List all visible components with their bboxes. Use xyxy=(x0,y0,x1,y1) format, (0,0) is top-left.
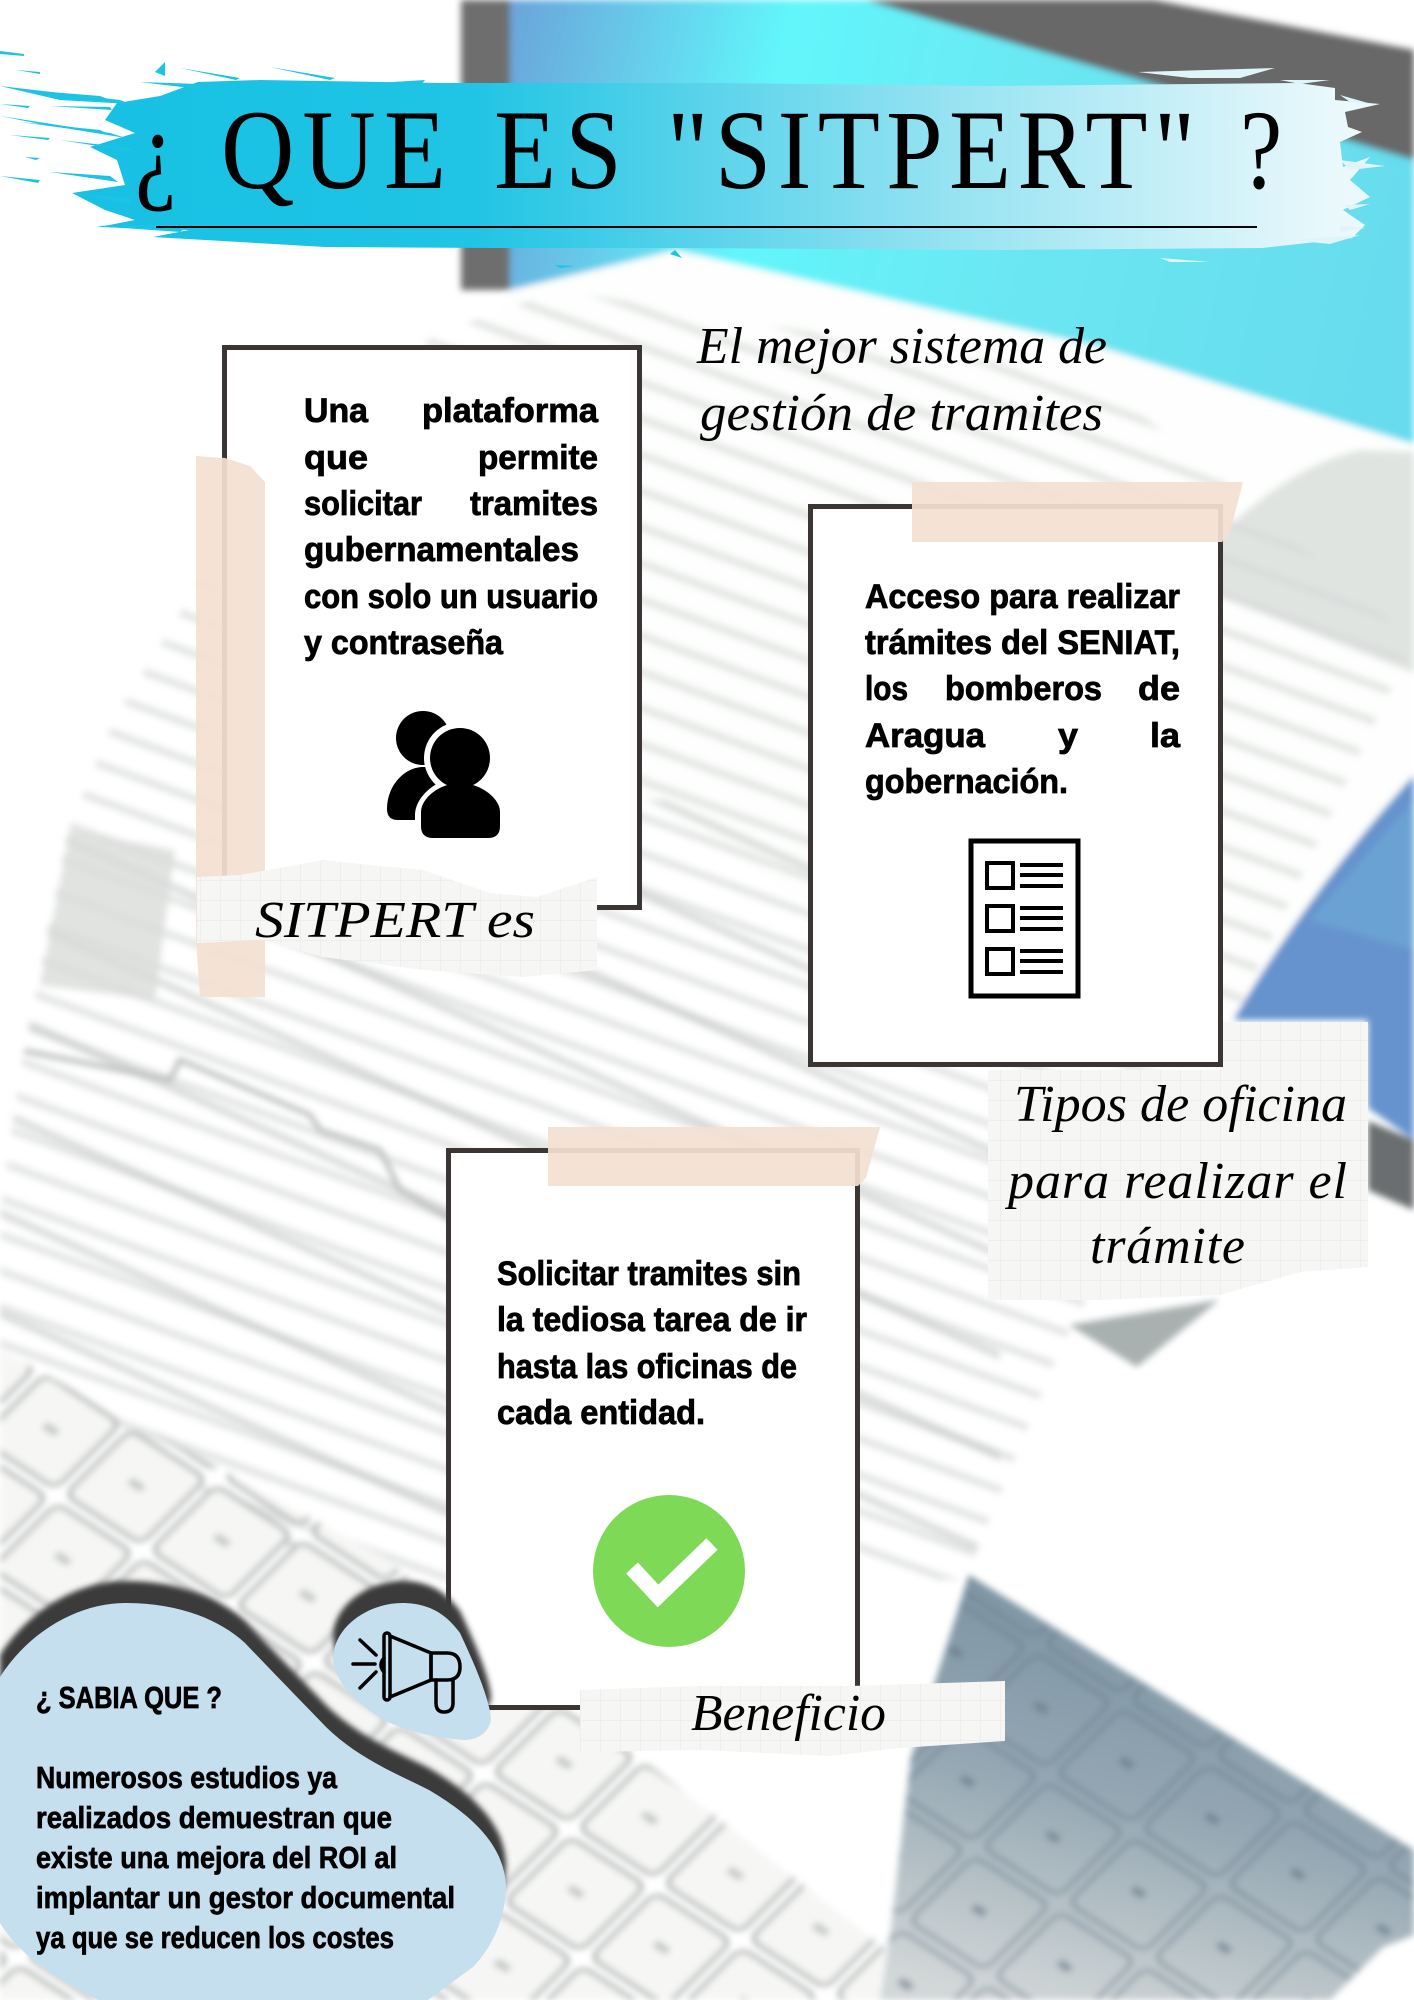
card text: bomberos xyxy=(945,670,1102,708)
torn paper label: SITPERT es xyxy=(255,892,535,949)
card text: Solicitar tramites sin xyxy=(497,1255,801,1293)
torn paper label: trámite xyxy=(1090,1218,1245,1275)
title: "SITPERT" xyxy=(667,88,1195,213)
icon: form document xyxy=(971,841,1078,996)
panel: que es sitpert xyxy=(196,348,640,997)
torn paper label xyxy=(197,860,597,977)
card text: la tediosa tarea de ir xyxy=(497,1301,807,1339)
torn paper label: Tipos de oficina xyxy=(1014,1076,1347,1133)
title: ? xyxy=(1240,88,1282,213)
callout body: implantar un gestor documental xyxy=(36,1880,455,1915)
subtitle handwriting: El mejor sistema de xyxy=(696,318,1107,375)
title: ES xyxy=(494,88,622,213)
large blob xyxy=(0,1603,506,2000)
card text: tramites xyxy=(470,485,598,523)
torn paper label: para realizar el xyxy=(1004,1153,1347,1210)
blob shadows xyxy=(0,1581,506,1978)
card text: plataforma xyxy=(422,392,599,430)
card text: hasta las oficinas de xyxy=(497,1348,797,1386)
callout body: existe una mejora del ROI al xyxy=(36,1840,397,1875)
card text: los xyxy=(865,670,908,708)
card text: que xyxy=(304,439,368,477)
card frame xyxy=(448,1150,858,1708)
title: QUE xyxy=(221,88,446,213)
tape strip xyxy=(196,456,265,997)
card text: permite xyxy=(478,439,598,477)
card text: la xyxy=(1150,717,1181,755)
icon: megaphone xyxy=(353,1633,460,1712)
callout: sabia que xyxy=(0,1581,506,2000)
card text: de xyxy=(1138,670,1180,708)
title: ¿ xyxy=(135,88,176,213)
tape strip xyxy=(912,482,1243,542)
card frame xyxy=(224,348,640,908)
card text: Acceso para realizar xyxy=(865,578,1180,616)
card text: cada entidad. xyxy=(497,1394,705,1432)
callout body xyxy=(36,1760,455,1955)
card text xyxy=(497,1255,807,1432)
icon: green check xyxy=(593,1495,745,1647)
tape strip xyxy=(548,1127,880,1186)
card text: con solo un usuario xyxy=(304,578,598,616)
card text: y xyxy=(1058,717,1078,755)
card text: gubernamentales xyxy=(304,531,579,569)
title xyxy=(135,88,1282,213)
callout body: realizados demuestran que xyxy=(36,1800,392,1835)
panel: tipos de oficina xyxy=(810,482,1368,1300)
torn paper label xyxy=(580,1681,1005,1756)
card text xyxy=(865,578,1181,801)
title brush stroke banner xyxy=(0,51,1385,268)
card text xyxy=(304,392,599,662)
title underline xyxy=(156,226,1257,228)
card text: y contraseña xyxy=(304,624,504,662)
card text: solicitar xyxy=(304,485,422,523)
callout body: ya que se reducen los costes xyxy=(36,1920,394,1955)
callout body: Numerosos estudios ya xyxy=(36,1760,338,1795)
subtitle handwriting xyxy=(696,318,1107,442)
card text: trámites del SENIAT, xyxy=(865,624,1180,662)
callout heading: ¿ SABIA QUE ? xyxy=(36,1680,222,1715)
torn paper label: Beneficio xyxy=(691,1685,886,1742)
small blob xyxy=(333,1603,491,1740)
card text: Una xyxy=(304,392,369,430)
card text: gobernación. xyxy=(865,763,1068,801)
card text: Aragua xyxy=(865,717,986,755)
subtitle handwriting: gestión de tramites xyxy=(700,385,1103,442)
icon: users xyxy=(387,711,506,845)
torn paper label xyxy=(988,1022,1368,1300)
panel: beneficio xyxy=(448,1127,1005,1756)
card frame xyxy=(810,506,1220,1064)
